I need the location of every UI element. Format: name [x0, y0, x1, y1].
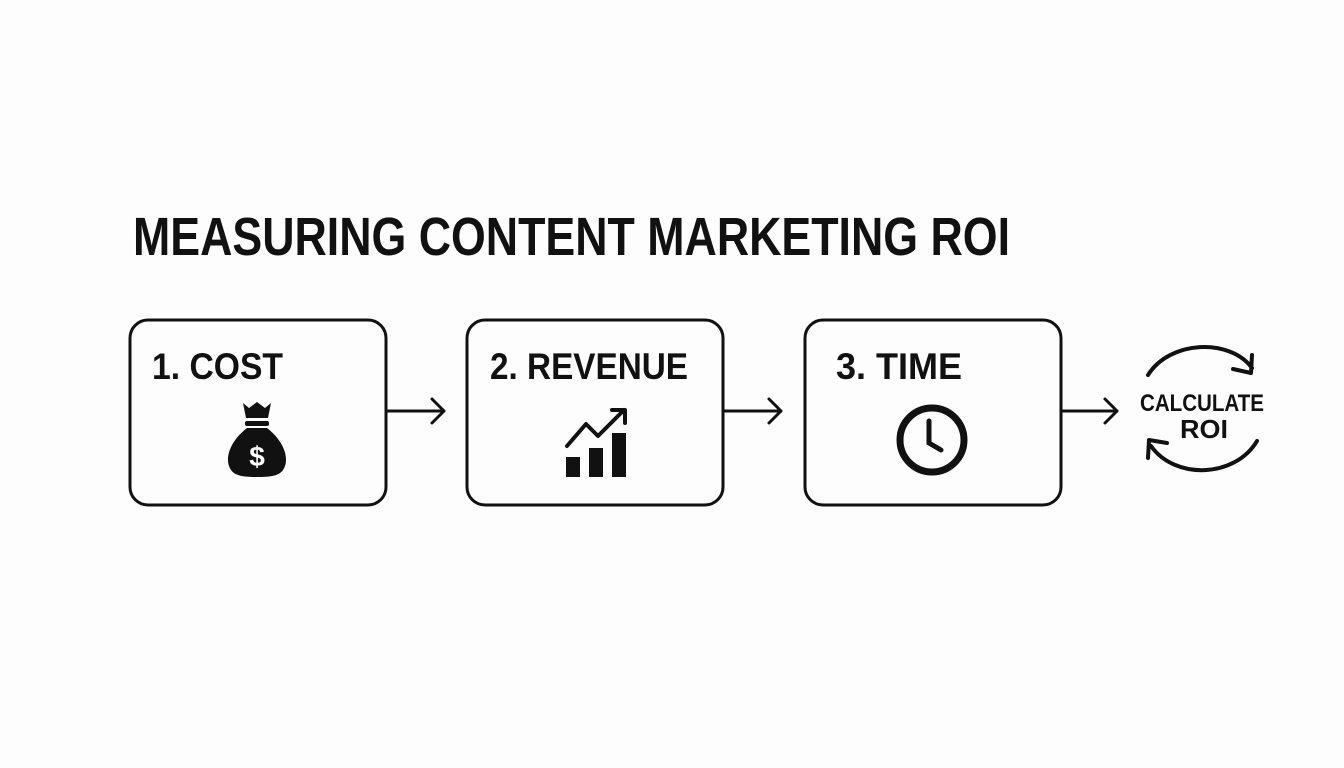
icon: growth chart — [566, 410, 626, 477]
icon: cycle arrows — [1148, 347, 1257, 470]
panel: time — [805, 320, 1061, 505]
arrow 3 — [1061, 399, 1117, 423]
icon: money bag — [228, 402, 286, 477]
panel: cost — [130, 320, 386, 505]
cycle: calculate ROI — [1140, 347, 1264, 470]
cycle: calculate ROI: ROI — [1180, 414, 1228, 444]
icon: clock — [900, 408, 964, 472]
title: MEASURING CONTENT MARKETING ROI — [133, 207, 1010, 267]
heading: revenue: 2. REVENUE — [490, 346, 688, 387]
heading: time: 3. TIME — [836, 346, 962, 387]
icon: money bag: $ — [249, 441, 265, 472]
arrow 2 — [723, 399, 781, 423]
arrow 1 — [386, 399, 444, 423]
panel: revenue — [467, 320, 723, 505]
heading: cost: 1. COST — [152, 346, 283, 387]
cycle: calculate ROI: CALCULATE — [1140, 390, 1264, 417]
